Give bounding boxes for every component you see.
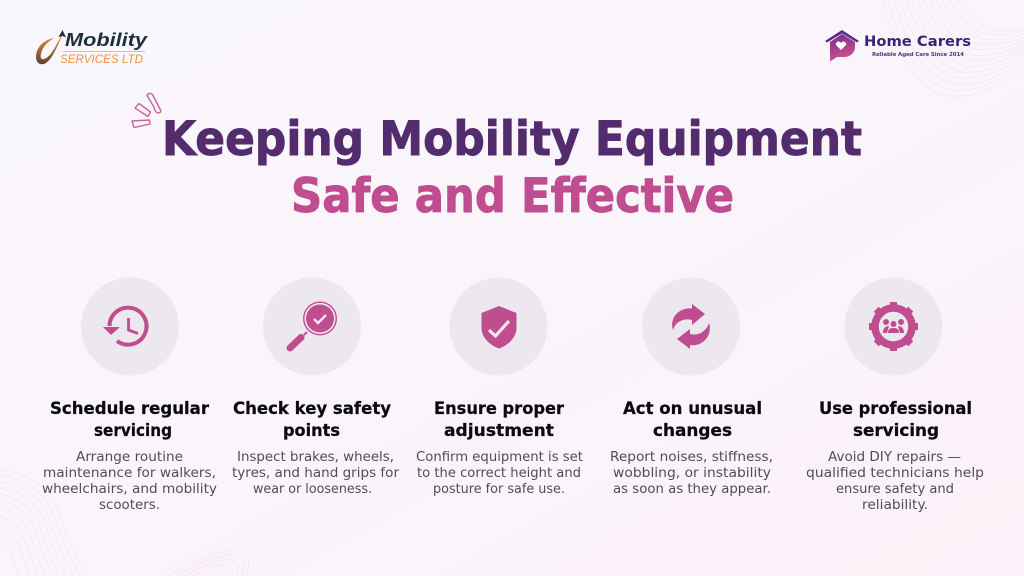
logo: Mobility Services Ltd [36,30,148,66]
heading: Schedule regular [50,399,210,419]
brand sub-name: SERVICES LTD [60,52,143,66]
description: Confirm equipment is set [416,450,583,465]
title line 1: Keeping Mobility Equipment [162,112,862,167]
description: wear or looseness. [253,482,372,497]
description: wheelchairs, and mobility [42,482,217,497]
panel: check key safety points [232,278,400,497]
brand name: Mobility [65,30,148,50]
description: reliability. [862,498,928,513]
description [232,450,400,497]
panel: check key safety points: points [283,421,340,441]
description: scooters. [99,498,160,513]
heading: Act on unusual [623,399,762,419]
description: qualified technicians help [806,466,984,481]
tagline: Reliable Aged Care Since 2014 [872,52,964,58]
description: posture for safe use. [433,482,565,497]
panel: act on unusual changes [610,278,773,497]
icon circle [263,278,361,376]
icon: clock history [103,308,146,345]
icon: swoosh with arrow [36,30,66,64]
description [42,450,217,513]
title [162,112,862,224]
decorative accent marks [132,93,161,128]
icon: magnifier with check [290,302,336,348]
description: to the correct height and [417,466,581,481]
description: tyres, and hand grips for [232,466,400,481]
description [416,450,583,497]
heading: Check key safety [233,399,391,419]
icon circle [450,278,548,376]
icon circle [81,278,179,376]
icon circle [844,278,942,376]
panel: schedule regular servicing [42,278,217,513]
title line 2: Safe and Effective [291,169,734,224]
panel: ensure proper adjustment: adjustment [444,421,554,441]
description: Arrange routine [76,450,183,465]
description: wobbling, or instability [613,466,771,481]
panel: use professional servicing [806,278,984,513]
brand name: Home Carers [864,34,971,50]
heading: Use professional [819,399,972,419]
description: Inspect brakes, wheels, [237,450,394,465]
panel: ensure proper adjustment [416,278,583,497]
description: Report noises, stiffness, [610,450,773,465]
icon circle [642,278,740,376]
logo: Home Carers [825,30,971,62]
brand rule [63,50,145,53]
panel: act on unusual changes: changes [653,421,732,441]
icon: refresh arrows [672,304,710,349]
description [610,450,773,497]
heading: Ensure proper [434,399,565,419]
description [806,450,984,513]
description: as soon as they appear. [613,482,771,497]
description: ensure safety and [836,482,954,497]
icon: gear with people [869,302,918,351]
description: maintenance for walkers, [43,466,216,481]
icon: house with speech bubble and heart [825,30,859,62]
icon: shield with check [482,306,516,348]
description: Avoid DIY repairs — [828,450,961,465]
panel: use professional servicing: servicing [853,421,939,441]
panel: schedule regular servicing: servicing [94,421,172,441]
